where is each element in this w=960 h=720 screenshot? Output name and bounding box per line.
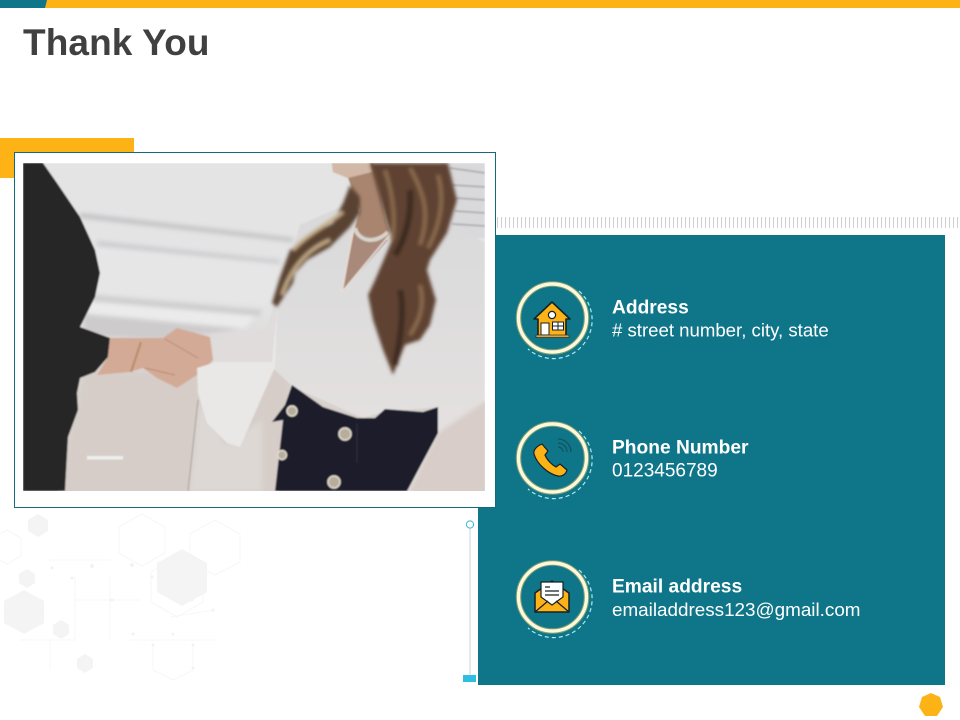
tick strip — [497, 217, 958, 228]
icon: email envelope — [518, 563, 592, 638]
panel: contact details background — [478, 235, 945, 685]
text: email address — [612, 576, 861, 620]
woman hair — [272, 163, 457, 375]
text: phone number: Phone Number — [612, 438, 749, 458]
text: address: Address — [612, 298, 689, 318]
left person clothing — [23, 163, 110, 491]
right sleeve cuff — [407, 400, 487, 495]
slider decoration — [463, 521, 476, 682]
icon: phone — [518, 424, 592, 499]
text: phone number — [612, 438, 749, 482]
photo: handshake — [23, 163, 487, 495]
left person arm and hand — [97, 328, 213, 388]
skirt — [272, 385, 438, 491]
title: Thank You — [23, 22, 210, 63]
text: phone number: 0123456789 — [612, 460, 718, 482]
background hexagon pattern — [0, 490, 240, 680]
necklace — [355, 228, 388, 240]
text: address — [612, 298, 829, 340]
photo frame — [14, 152, 496, 508]
text: email address: Email address — [612, 576, 742, 598]
yellow accent block — [0, 138, 134, 178]
text: email address: emailaddress123@gmail.com — [612, 599, 861, 620]
icon: address house — [518, 284, 592, 359]
woman face and chest — [346, 163, 390, 275]
page marker heptagon — [919, 693, 943, 716]
skirt buttons — [278, 406, 351, 488]
text: address: # street number, city, state — [612, 320, 829, 340]
woman bell sleeve — [196, 338, 276, 447]
top accent bar — [0, 0, 960, 8]
right wall stripes — [450, 168, 485, 226]
woman blouse — [256, 205, 485, 491]
